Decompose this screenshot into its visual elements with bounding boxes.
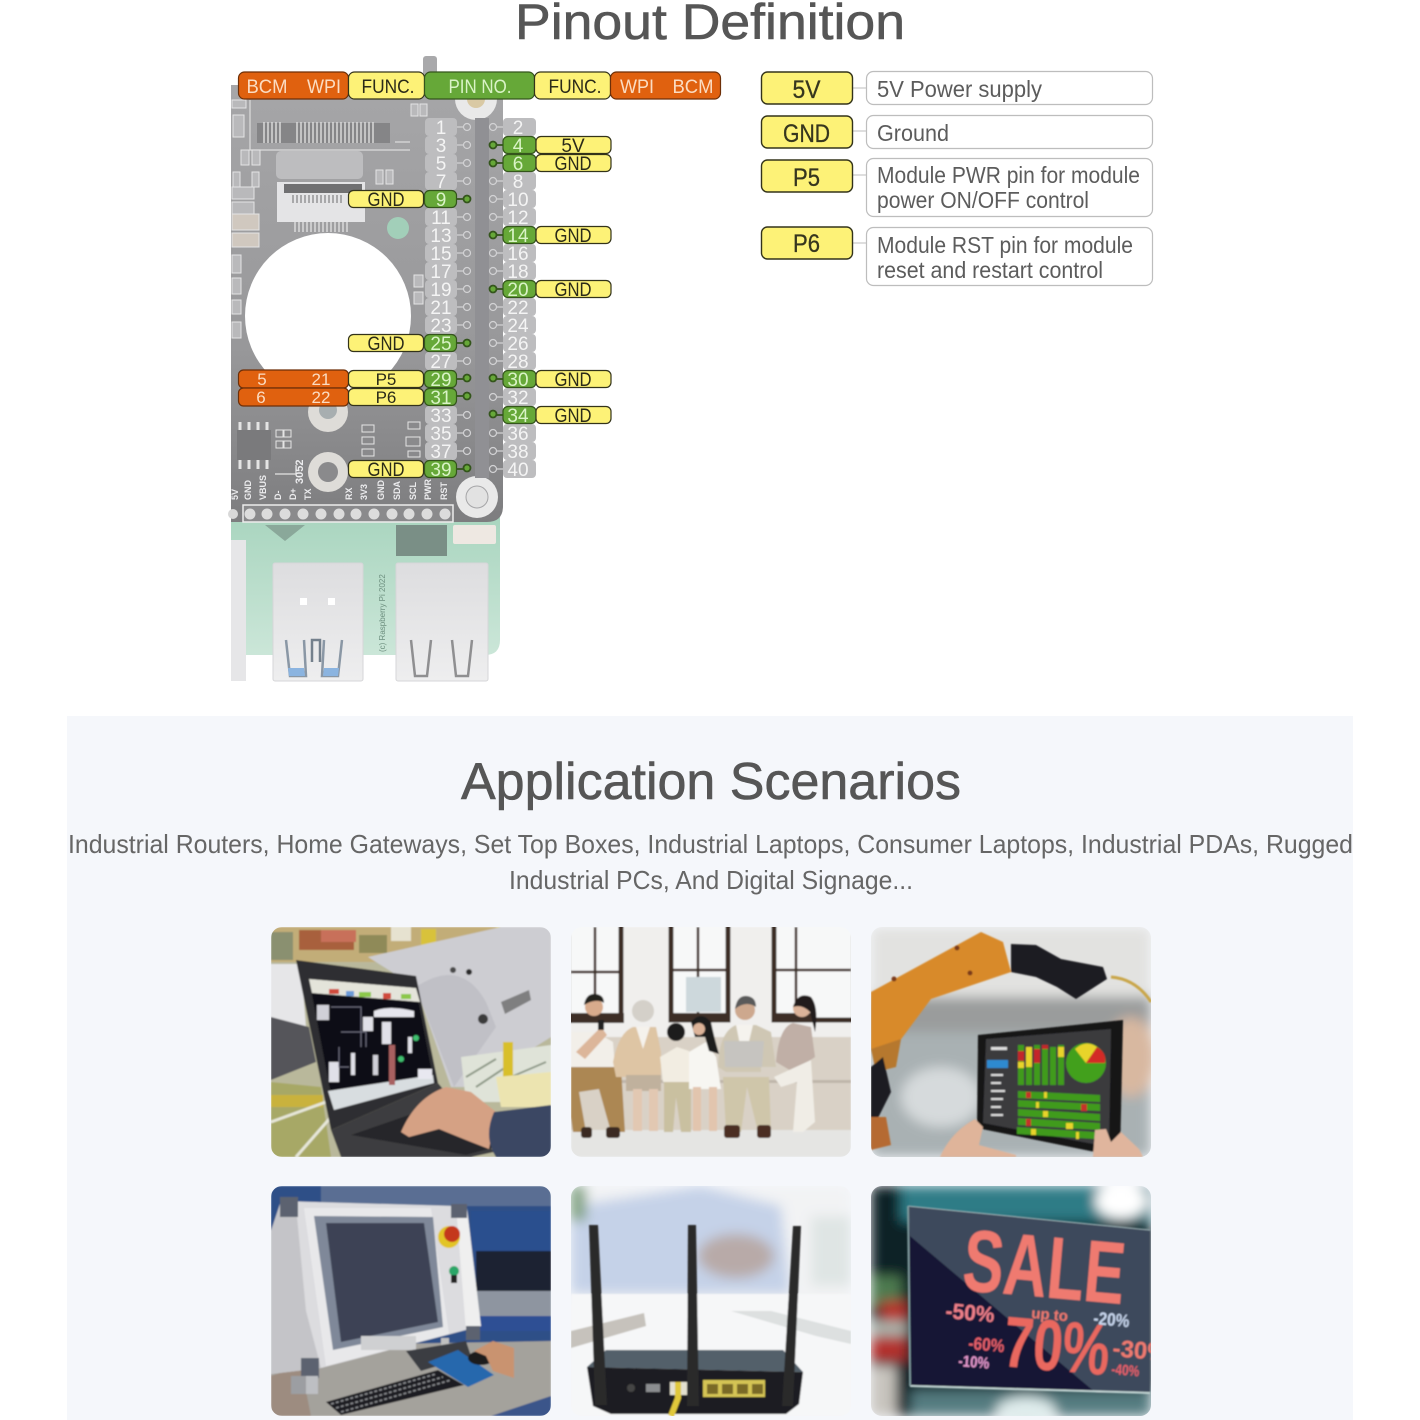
inactive left pin numbers: 7	[436, 172, 446, 193]
right pin 4: 5V	[490, 136, 611, 157]
inactive right pin numbers: 36	[507, 424, 529, 445]
woman	[776, 1023, 815, 1072]
photo: digital signage: -40%	[1111, 1361, 1140, 1380]
inactive left pin numbers: 21	[430, 298, 452, 319]
description text: Industrial Routers, Home Gateways, Set Top Boxes, Industrial Laptops, Consumer Laptops, Industrial PDAs, Rugged	[68, 829, 1353, 859]
hand	[401, 1087, 496, 1149]
inactive left pin numbers: 19	[430, 280, 452, 301]
silkscreen labels: SCL	[408, 481, 418, 500]
mounting holes	[455, 78, 498, 518]
table header row: FUNC.	[362, 77, 414, 98]
right pin 14: GND	[490, 226, 611, 247]
right pin 20: GND: 20	[507, 280, 529, 301]
table header row: PIN NO.	[448, 77, 512, 98]
legend: P5: Module PWR pin for module	[877, 162, 1140, 188]
left pin 31: P6	[238, 388, 470, 409]
silkscreen labels: VBUS	[258, 475, 268, 500]
grandmother	[613, 1027, 661, 1077]
table header row: WPI	[620, 77, 654, 98]
inactive left pin numbers: 15	[430, 244, 452, 265]
right pin 14: GND: GND	[554, 226, 592, 247]
table header row: BCM	[246, 77, 288, 98]
FFC connector	[277, 182, 365, 232]
right pin 34: GND	[490, 406, 611, 427]
right pin 6: GND: 6	[513, 154, 523, 175]
board photo: (c) Raspberry Pi 2022	[378, 574, 387, 652]
right pin 20: GND	[490, 280, 611, 301]
small parts, left edge	[232, 100, 427, 338]
left pin 25: GND: 25	[430, 334, 452, 355]
photo: digital signage: -10%	[958, 1353, 990, 1373]
screw	[308, 392, 348, 432]
legend: 5V: 5V	[792, 76, 821, 104]
table header row: WPI	[307, 77, 341, 98]
silkscreen labels	[230, 475, 449, 500]
legend: 5V: 5V Power supply	[877, 76, 1042, 102]
inactive right pin numbers: 10	[507, 190, 529, 211]
inactive right pin numbers: 40	[507, 460, 529, 481]
inactive right pin numbers: 12	[507, 208, 529, 229]
inactive left pin numbers: 17	[430, 262, 452, 283]
photo: robot arm and tablet	[871, 927, 1156, 1157]
photo: industrial laptop	[271, 927, 551, 1157]
right pin 4: 5V: 4	[513, 136, 524, 157]
description text: Industrial PCs, And Digital Signage...	[509, 865, 913, 895]
right pin 6: GND	[490, 154, 611, 175]
inactive right pin numbers: 22	[507, 298, 529, 319]
table header row: FUNC.	[548, 77, 602, 98]
right pin 30: GND: GND	[554, 370, 592, 391]
inactive left pin numbers: 23	[430, 316, 452, 337]
right pin 6: GND: GND	[554, 154, 592, 175]
left pin 29: P5: 21	[312, 370, 330, 389]
silkscreen labels: SDA	[392, 480, 402, 500]
silkscreen labels: TX	[303, 488, 313, 500]
right pin 30: GND: 30	[507, 370, 529, 391]
left pin 9: GND: GND	[368, 190, 404, 211]
right pin 34: GND: 34	[507, 406, 529, 427]
chip and passives	[237, 422, 420, 484]
left pin 31: P6: 22	[312, 388, 330, 407]
boy	[660, 1047, 693, 1082]
left pin 31: P6: 31	[430, 388, 452, 409]
photo: wireless router	[571, 1186, 851, 1416]
mounting post	[423, 56, 437, 76]
inactive right pin numbers: 24	[507, 316, 529, 337]
inactive left pin numbers: 13	[430, 226, 452, 247]
ghost pin stubs	[457, 124, 503, 472]
inactive right pin numbers: 26	[507, 334, 529, 355]
legend: P5: P5	[793, 164, 820, 192]
right pin 34: GND: GND	[554, 406, 592, 427]
silkscreen labels: D+	[288, 488, 298, 500]
legend: P6: P6	[793, 230, 820, 258]
heading: Application Scenarios: Application Scenarios	[461, 753, 961, 811]
camera connector	[250, 100, 410, 150]
left pin 9: GND	[348, 190, 470, 211]
left pin 9: GND: 9	[436, 190, 446, 211]
legend: P6: Module RST pin for module	[877, 232, 1133, 258]
left pin 31: P6: 6	[256, 388, 266, 407]
left pin 29: P5: 29	[430, 370, 452, 391]
silkscreen labels: 3V3	[359, 484, 369, 500]
silkscreen labels: RST	[439, 481, 449, 500]
left pin 39: GND: GND	[368, 460, 404, 481]
round battery cutout	[245, 233, 411, 399]
bottom pad row	[228, 505, 453, 522]
inactive left pin numbers: 27	[430, 352, 452, 373]
inactive right pin numbers: 38	[507, 442, 529, 463]
inactive right pin numbers: 18	[507, 262, 529, 283]
grandfather	[718, 1025, 776, 1072]
silkscreen labels: PWR	[423, 479, 433, 500]
photo: digital signage: 70%	[1001, 1302, 1113, 1391]
hands	[940, 1119, 1016, 1157]
black HAT board	[231, 85, 503, 522]
pin header strip	[475, 118, 489, 478]
board photo	[228, 56, 503, 681]
girl	[689, 1042, 721, 1089]
silkscreen labels: D-	[273, 490, 283, 500]
left pin 25: GND	[348, 334, 470, 355]
inactive left pin numbers: 37	[430, 442, 452, 463]
green Raspberry Pi board	[231, 515, 500, 655]
inactive right pin numbers: 8	[513, 172, 523, 193]
left pin 29: P5: 5	[257, 370, 267, 389]
photo: digital signage: up to	[1031, 1305, 1069, 1325]
inactive left pin numbers: 5	[436, 154, 446, 175]
table header row: BCM	[672, 77, 714, 98]
photo: digital signage: SALE	[959, 1210, 1129, 1323]
right pin 14: GND: 14	[507, 226, 529, 247]
silkscreen labels: GND	[376, 480, 386, 500]
legend: P5	[762, 158, 1152, 216]
right pin 30: GND	[490, 370, 611, 391]
right pin 20: GND: GND	[554, 280, 592, 301]
left pin 39: GND: 39	[430, 460, 452, 481]
photo: industrial panel PC	[271, 1186, 551, 1416]
legend: GND	[762, 116, 1152, 148]
legend: GND: Ground	[877, 120, 949, 146]
teal test point	[387, 217, 409, 239]
silkscreen labels: 5V	[230, 489, 240, 500]
photo: digital signage: -20%	[1093, 1308, 1130, 1331]
inactive right pin numbers: 2	[513, 118, 523, 139]
silkscreen labels: GND	[243, 480, 253, 500]
inactive right pin numbers	[503, 118, 536, 481]
USB ports	[231, 540, 246, 681]
left pin 25: GND: GND	[368, 334, 404, 355]
legend: P6	[762, 227, 1152, 286]
legend: 5V	[762, 72, 1152, 104]
lower screw	[308, 452, 348, 492]
inactive right pin numbers: 16	[507, 244, 529, 265]
laptop	[296, 960, 438, 1130]
photo: digital signage	[871, 1183, 1170, 1420]
inactive left pin numbers: 3	[436, 136, 446, 157]
description text	[68, 829, 1353, 895]
table header row	[238, 72, 720, 99]
legend: P5: power ON/OFF control	[877, 187, 1089, 213]
inactive left pin numbers: 1	[436, 118, 446, 139]
legend: P6: reset and restart control	[877, 257, 1103, 283]
left pin 31: P6: P6	[376, 388, 396, 407]
left pin 39: GND	[348, 460, 470, 481]
inactive left pin numbers	[425, 118, 457, 463]
left pin 29: P5: P5	[376, 370, 396, 389]
inactive left pin numbers: 11	[431, 208, 451, 229]
photo: digital signage: -50%	[945, 1298, 996, 1327]
legend: GND: GND	[783, 120, 830, 148]
tablet	[977, 1020, 1123, 1157]
photo: digital signage: -60%	[968, 1333, 1005, 1356]
silkscreen labels: RX	[344, 487, 354, 500]
inactive left pin numbers: 33	[430, 406, 452, 427]
panel: application scenarios	[67, 716, 1353, 1420]
right pin 4: 5V: 5V	[561, 136, 585, 157]
photo: digital signage: -30%	[1111, 1335, 1170, 1367]
left pin 29: P5	[238, 370, 470, 391]
photo: family on a sofa	[568, 922, 854, 1157]
inactive right pin numbers: 32	[507, 388, 529, 409]
inactive right pin numbers: 28	[507, 352, 529, 373]
chip and passives: 3052	[294, 460, 306, 484]
man	[571, 1032, 615, 1067]
inactive left pin numbers: 35	[430, 424, 452, 445]
